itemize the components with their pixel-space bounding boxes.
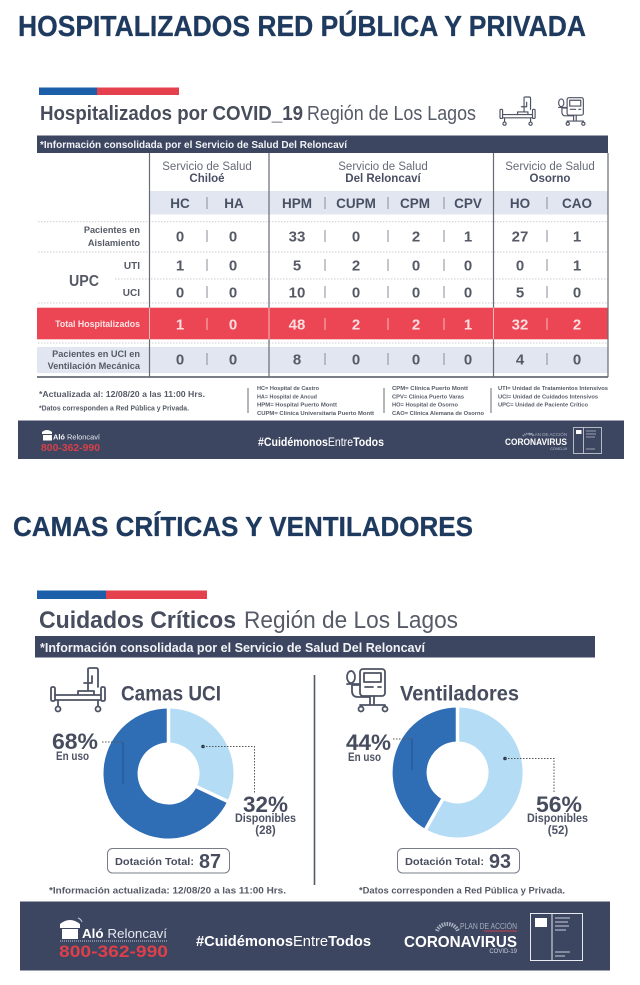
- panel title: Hospitalizados por COVID_19: [40, 103, 303, 125]
- abbreviations legend: HC= Hospital de Castro: [257, 386, 320, 392]
- abbreviations legend: CUPM= Clínica Universitaria Puerto Montt: [257, 411, 374, 417]
- row: total hospitalizados: 1: [176, 316, 184, 334]
- icon: ventilator: [347, 669, 388, 712]
- callout: disponibles: [503, 757, 588, 837]
- panel title: Cuidados Críticos: [39, 607, 236, 634]
- service headers: Servicio de Salud: [505, 161, 595, 173]
- row: UCI: 0: [573, 284, 581, 302]
- plan coronavirus logo: CORONAVIRUS: [404, 934, 517, 951]
- abbreviations legend: UCI= Unidad de Cuidados Intensivos: [498, 394, 598, 400]
- heading: camas criticas: CAMAS CRÍTICAS Y VENTILADORES: [13, 511, 473, 542]
- panel title: Región de Los Lagos: [307, 103, 476, 125]
- plan coronavirus logo: COVID-19: [550, 447, 567, 451]
- callout: disponibles: (52): [548, 825, 568, 837]
- row labels: [48, 225, 141, 371]
- callout: en uso: 44%: [346, 730, 391, 755]
- plan coronavirus logo: PLAN DE ACCIÓN: [529, 431, 567, 437]
- row labels: Pacientes en: [84, 225, 140, 235]
- row: ventilacion mecanica: 8: [293, 352, 301, 368]
- row: aislamiento: 0: [352, 228, 360, 246]
- row: UTI: 2: [352, 258, 360, 274]
- row labels: Aislamiento: [88, 238, 140, 248]
- donut chart: ventiladores: [393, 706, 523, 837]
- row: UCI: 10: [289, 284, 305, 302]
- column headers: CUPM: [336, 196, 376, 211]
- helpline: 800-362-990: [41, 443, 100, 454]
- row: UCI: 0: [176, 284, 184, 302]
- row labels: Ventilación Mecánica: [48, 361, 141, 371]
- row: UCI: 0: [352, 284, 360, 302]
- column headers: HPM: [282, 196, 312, 211]
- abbreviations legend: CPV= Clínica Puerto Varas: [392, 394, 464, 400]
- row: aislamiento: 33: [289, 228, 305, 246]
- row: UTI: 0: [229, 258, 237, 274]
- column headers: CPV: [454, 196, 482, 211]
- row: ventilacion mecanica: 0: [573, 352, 581, 368]
- table: [37, 153, 608, 377]
- heading: Camas UCI: [121, 682, 221, 706]
- update notes: *Actualizada al: 12/08/20 a las 11:00 Hrs.: [39, 390, 205, 399]
- column headers: HO: [510, 196, 530, 211]
- abbreviations legend: HA= Hospital de Ancud: [257, 394, 318, 400]
- table bands: [37, 191, 608, 373]
- update notes: *Datos corresponden a Red Pública y Privada.: [39, 406, 189, 412]
- total box: Dotación Total:: [405, 856, 484, 868]
- callout: disponibles: (28): [255, 825, 276, 837]
- hashtag: #CuidémonosEntreTodos: [196, 933, 371, 950]
- column headers: CAO: [562, 196, 592, 211]
- data note: *Datos corresponden a Red Pública y Privada.: [359, 886, 565, 896]
- plan coronavirus logo: [404, 922, 518, 955]
- row: aislamiento: [176, 228, 581, 246]
- row: total hospitalizados: 0: [229, 316, 237, 334]
- abbreviations legend: HPM= Hospital Puerto Montt: [257, 402, 337, 408]
- callout: en uso: 68%: [52, 729, 98, 754]
- row: UCI: 5: [516, 284, 524, 302]
- row: UTI: 0: [412, 258, 420, 274]
- plan coronavirus logo: CORONAVIRUS: [505, 437, 567, 447]
- info banner: [35, 636, 595, 658]
- callout: disponibles: [201, 745, 296, 837]
- callout: disponibles: Disponibles: [235, 813, 296, 825]
- panel: hospitalizados por COVID: [18, 88, 624, 459]
- callout: en uso: [346, 730, 412, 770]
- icon: hospital bed: [500, 97, 535, 125]
- total box: [108, 848, 230, 873]
- panel: cuidados criticos: [20, 590, 610, 970]
- row: aislamiento: 1: [464, 228, 472, 246]
- abbreviations legend: CAO= Clínica Alemana de Osorno: [392, 411, 485, 417]
- icon: ventilator: [559, 98, 585, 125]
- row: UTI: 0: [464, 258, 472, 274]
- ventiladores: [346, 669, 588, 896]
- row: ventilacion mecanica: [176, 352, 581, 368]
- info banner: *Información consolidada por el Servicio de Salud Del Reloncaví: [40, 641, 426, 655]
- row labels: Pacientes en UCI en: [52, 349, 140, 359]
- donut chart: camas UCI: [103, 707, 233, 838]
- row: ventilacion mecanica: 4: [516, 352, 525, 368]
- column headers: HA: [224, 196, 244, 211]
- row: aislamiento: 1: [573, 228, 581, 246]
- row labels: UPC: [69, 273, 99, 290]
- row: total hospitalizados: 2: [352, 316, 360, 334]
- icon: telephone: [60, 918, 82, 939]
- helpline: Aló Reloncaví: [53, 432, 101, 442]
- callout: en uso: En uso: [56, 751, 89, 763]
- row: UCI: 0: [412, 284, 420, 302]
- abbreviations legend: HO= Hospital de Osorno: [392, 402, 459, 408]
- flag bar: [37, 590, 207, 599]
- hashtag: #CuidémonosEntreTodos: [258, 437, 384, 449]
- row: ventilacion mecanica: 0: [229, 352, 237, 368]
- row: aislamiento: 0: [176, 228, 184, 246]
- row: UCI: 0: [464, 284, 472, 302]
- abbreviations legend: UTI= Unidad de Tratamientos Intensivos: [498, 386, 608, 392]
- helpline: 800-362-990: [59, 942, 168, 961]
- row: ventilacion mecanica: 0: [176, 352, 184, 368]
- panel title: Región de Los Lagos: [244, 607, 458, 634]
- ministry logo: [530, 914, 582, 960]
- info banner: [37, 136, 608, 153]
- service headers: Servicio de Salud: [162, 161, 252, 173]
- callout: en uso: [52, 729, 123, 784]
- total box: Dotación Total:: [115, 856, 194, 868]
- ministry logo: [574, 428, 602, 454]
- plan coronavirus logo: PLAN DE ACCIÓN: [460, 922, 517, 931]
- row: UTI: 0: [516, 258, 524, 274]
- footer bar top: [18, 420, 624, 459]
- service headers: Del Reloncaví: [345, 173, 422, 185]
- plan coronavirus logo: [505, 431, 567, 451]
- total box: [398, 848, 520, 873]
- total box: 87: [199, 851, 221, 873]
- service headers: Servicio de Salud: [338, 161, 428, 173]
- row: ventilacion mecanica: 0: [352, 352, 360, 368]
- abbreviations legend: UPC= Unidad de Paciente Crítico: [498, 402, 589, 408]
- plan coronavirus logo: COVID-19: [489, 949, 518, 955]
- row labels: UCI: [123, 288, 140, 299]
- service headers: [162, 161, 595, 185]
- abbreviations legend: CPM= Clínica Puerto Montt: [392, 386, 468, 392]
- row: aislamiento: 27: [512, 228, 528, 246]
- row: total hospitalizados: 48: [289, 316, 305, 334]
- row: UCI: [176, 284, 581, 302]
- callout: disponibles: Disponibles: [527, 813, 588, 825]
- update note: *Información actualizada: 12/08/20 a las 11:00 Hrs.: [49, 886, 286, 896]
- service headers: Osorno: [530, 173, 570, 185]
- service headers: Chiloé: [189, 173, 225, 185]
- column headers: CPM: [400, 196, 430, 211]
- row: UTI: [176, 258, 581, 274]
- row: total hospitalizados: 32: [512, 316, 528, 334]
- callout: disponibles: 32%: [243, 792, 288, 817]
- row: aislamiento: 2: [412, 228, 420, 246]
- total box: 93: [489, 851, 511, 873]
- heading: Ventiladores: [400, 682, 519, 706]
- panel title: [39, 607, 458, 634]
- row: UTI: 1: [573, 258, 581, 274]
- callout: en uso: En uso: [348, 752, 381, 764]
- update notes: [39, 390, 205, 412]
- column headers: [170, 196, 592, 211]
- heading: hospitalizados: HOSPITALIZADOS RED PÚBLICA Y PRIVADA: [18, 9, 586, 43]
- row: total hospitalizados: [176, 316, 581, 334]
- panel title: [40, 103, 476, 125]
- footer bar bottom: [20, 902, 610, 970]
- row: total hospitalizados: 2: [573, 316, 581, 334]
- helpline: Aló Reloncaví: [82, 926, 167, 941]
- row: UTI: 1: [176, 258, 184, 274]
- flag bar: [39, 88, 179, 95]
- row: ventilacion mecanica: 0: [464, 352, 472, 368]
- helpline: [41, 432, 101, 454]
- abbreviations legend: [248, 386, 608, 417]
- row: ventilacion mecanica: 0: [412, 352, 420, 368]
- info banner: *Información consolidada por el Servicio de Salud Del Reloncaví: [40, 140, 348, 151]
- callout: disponibles: 56%: [536, 792, 582, 817]
- camas UCI: [49, 668, 296, 896]
- row: total hospitalizados: 1: [464, 316, 472, 334]
- row: aislamiento: 0: [229, 228, 237, 246]
- row: UCI: 0: [229, 284, 237, 302]
- icon: hospital bed: [51, 668, 105, 712]
- center divider: [314, 675, 315, 885]
- row: total hospitalizados: 2: [412, 316, 420, 334]
- column headers: HC: [170, 196, 190, 211]
- helpline: [59, 926, 168, 961]
- row: UTI: 5: [293, 258, 301, 274]
- row labels: UTI: [124, 261, 140, 272]
- row labels: Total Hospitalizados: [55, 319, 140, 329]
- icon: telephone: [42, 430, 52, 440]
